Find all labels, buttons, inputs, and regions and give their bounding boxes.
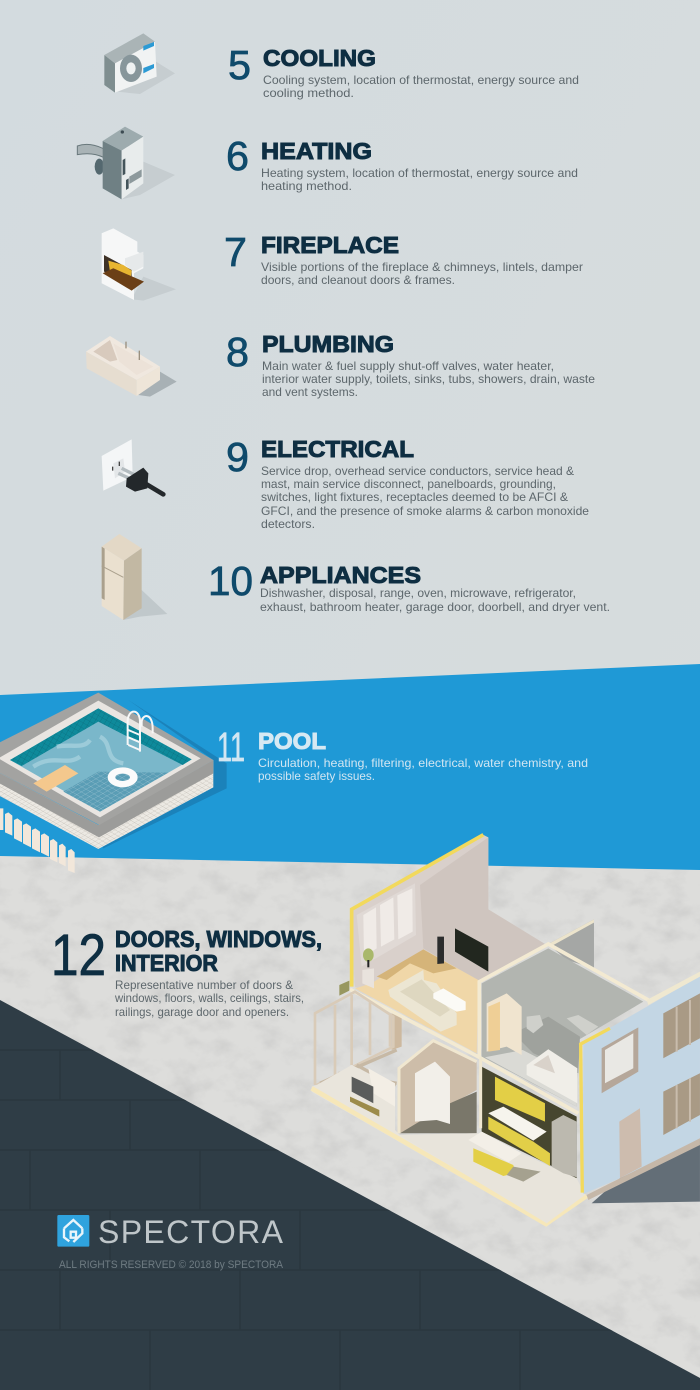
yellow facade edge: [581, 1028, 610, 1193]
pool upper tile band: [10, 708, 192, 766]
back column seen through balcony: [392, 1013, 402, 1050]
pool white coping: [0, 701, 201, 817]
bathroom door: [487, 993, 522, 1055]
number 12: 12: [51, 923, 106, 988]
description cooling: Cooling system, location of thermostat, energy source and: [263, 73, 579, 87]
blue pool band: [0, 664, 700, 870]
description electrical: Service drop, overhead service conductors, service head &: [261, 464, 574, 478]
description pool: Circulation, heating, filtering, electrical, water chemistry, and: [258, 756, 588, 770]
living room floor: [355, 949, 478, 1053]
icon: fireplace: [102, 228, 176, 301]
heading plumbing: PLUMBING: [262, 331, 394, 357]
description plumbing: Main water & fuel supply shut-off valves, water heater,: [262, 359, 554, 373]
illustration: swimming pool: [0, 693, 227, 873]
lower room floor: [400, 1092, 477, 1133]
section 5: cooling: [104, 33, 579, 100]
icon: furnace: [77, 127, 175, 199]
description appliances line 2: exhaust, bathroom heater, garage door, doorbell, and dryer vent.: [260, 600, 610, 614]
section 6: heating: [77, 127, 578, 199]
icon: plug and outlet: [102, 439, 163, 494]
pool gray band: [0, 757, 213, 837]
heading interior: INTERIOR: [115, 950, 218, 976]
logo: spectora: [57, 1214, 284, 1250]
number 7: 7: [224, 229, 247, 275]
television: [455, 928, 488, 972]
background: lower plaster wall: [0, 850, 700, 1390]
icon: bathtub: [86, 336, 177, 397]
description fireplace line 2: doors, and cleanout doors & frames.: [261, 273, 455, 287]
lower left balcony glass: [315, 992, 393, 1085]
bathroom walls: [482, 948, 643, 1107]
coffee table: [433, 988, 466, 1012]
description electrical line 4: GFCI, and the presence of smoke alarms & carbon monoxide: [261, 504, 589, 518]
description plumbing line 3: and vent systems.: [262, 385, 358, 399]
kitchen island: [473, 1148, 515, 1176]
pool stone rim: [0, 693, 213, 825]
description electrical line 2: mast, main service disconnect, panelboards, grounding,: [261, 477, 556, 491]
heading electrical: ELECTRICAL: [261, 436, 414, 462]
number 10: 10: [208, 558, 253, 604]
section 11: pool: [0, 693, 588, 873]
lower room wall: [399, 1042, 477, 1133]
house blue facade: [583, 976, 700, 1194]
description doors: Representative number of doors &: [115, 978, 293, 992]
number 9: 9: [226, 434, 249, 480]
pool tiled side walls: [0, 757, 213, 849]
heading doors windows: DOORS, WINDOWS,: [115, 926, 322, 952]
description appliances: Dishwasher, disposal, range, oven, microwave, refrigerator,: [260, 586, 576, 600]
section 10: appliances: [102, 534, 610, 620]
lower room door: [415, 1062, 450, 1124]
description heating line 2: heating method.: [261, 179, 352, 193]
house ground shadow: [592, 1140, 700, 1203]
heading pool: POOL: [258, 728, 326, 754]
sofa: [388, 970, 457, 1032]
description plumbing line 2: interior water supply, toilets, sinks, tubs, showers, drain, waste: [262, 372, 595, 386]
description doors line 3: railings, garage door and openers.: [115, 1005, 289, 1019]
icon: air conditioner: [104, 33, 175, 94]
plant and pot: [362, 948, 374, 988]
section 9: electrical: [102, 434, 589, 531]
description electrical line 5: detectors.: [261, 517, 315, 531]
pool shadow: [98, 700, 227, 848]
wall tops: [350, 944, 648, 1113]
section 8: plumbing: [86, 329, 595, 399]
yellow wall edge: [352, 835, 483, 987]
speaker: [437, 937, 444, 964]
facade window small: [602, 1027, 638, 1093]
number 8: 8: [226, 329, 249, 375]
toilet and sink: [527, 1015, 598, 1035]
balcony bed and tv: [350, 1068, 395, 1117]
swirl highlights: [33, 737, 123, 767]
number 5: 5: [228, 42, 251, 88]
copyright: ALL RIGHTS RESERVED © 2018 by SPECTORA: [59, 1259, 284, 1271]
heading cooling: COOLING: [263, 45, 376, 71]
heading fireplace: FIREPLACE: [261, 232, 399, 258]
icon: refrigerator: [102, 534, 167, 620]
dark brick wall corner: [0, 1000, 700, 1390]
bathroom floor: [513, 1017, 580, 1073]
pool floor tiles: [63, 772, 168, 812]
fridge: [552, 1115, 577, 1177]
description pool line 2: possible safety issues.: [258, 769, 375, 783]
ladder: [128, 712, 153, 752]
living room windows: [363, 888, 413, 957]
description electrical line 3: switches, light fixtures, receptacles deemed to be AFCI &: [261, 490, 568, 504]
rear gray wall: [548, 919, 594, 968]
section 12: doors, windows, interior: [51, 923, 322, 1019]
kitchen upper cabinets: [495, 1077, 545, 1122]
heading heating: HEATING: [261, 138, 372, 164]
logo icon: [57, 1215, 89, 1247]
number 11: 11: [217, 724, 245, 770]
pool water: [10, 708, 192, 812]
facade door: [619, 1108, 642, 1178]
fence: [0, 808, 75, 873]
number 6: 6: [226, 133, 249, 179]
description heating: Heating system, location of thermostat, energy source and: [261, 166, 578, 180]
upper left wall: [352, 834, 545, 1053]
bathtub: [527, 1049, 577, 1103]
section 7: fireplace: [102, 228, 583, 301]
facade windows: [663, 993, 700, 1058]
kitchen counter: [488, 1107, 547, 1141]
logo wordmark: SPECTORA: [98, 1214, 284, 1250]
olive wall patch: [339, 981, 349, 996]
heading appliances: APPLIANCES: [260, 562, 421, 588]
description fireplace: Visible portions of the fireplace & chimneys, lintels, damper: [261, 260, 583, 274]
illustration: isometric house cutaway: [312, 834, 700, 1227]
swim ring: [108, 767, 138, 787]
kitchen back wall: [482, 1067, 577, 1178]
description cooling line 2: cooling method.: [263, 86, 354, 100]
description doors line 2: windows, floors, walls, ceilings, stairs,: [114, 991, 304, 1005]
diving board: [33, 765, 78, 792]
lower floor slab: [312, 1065, 587, 1227]
